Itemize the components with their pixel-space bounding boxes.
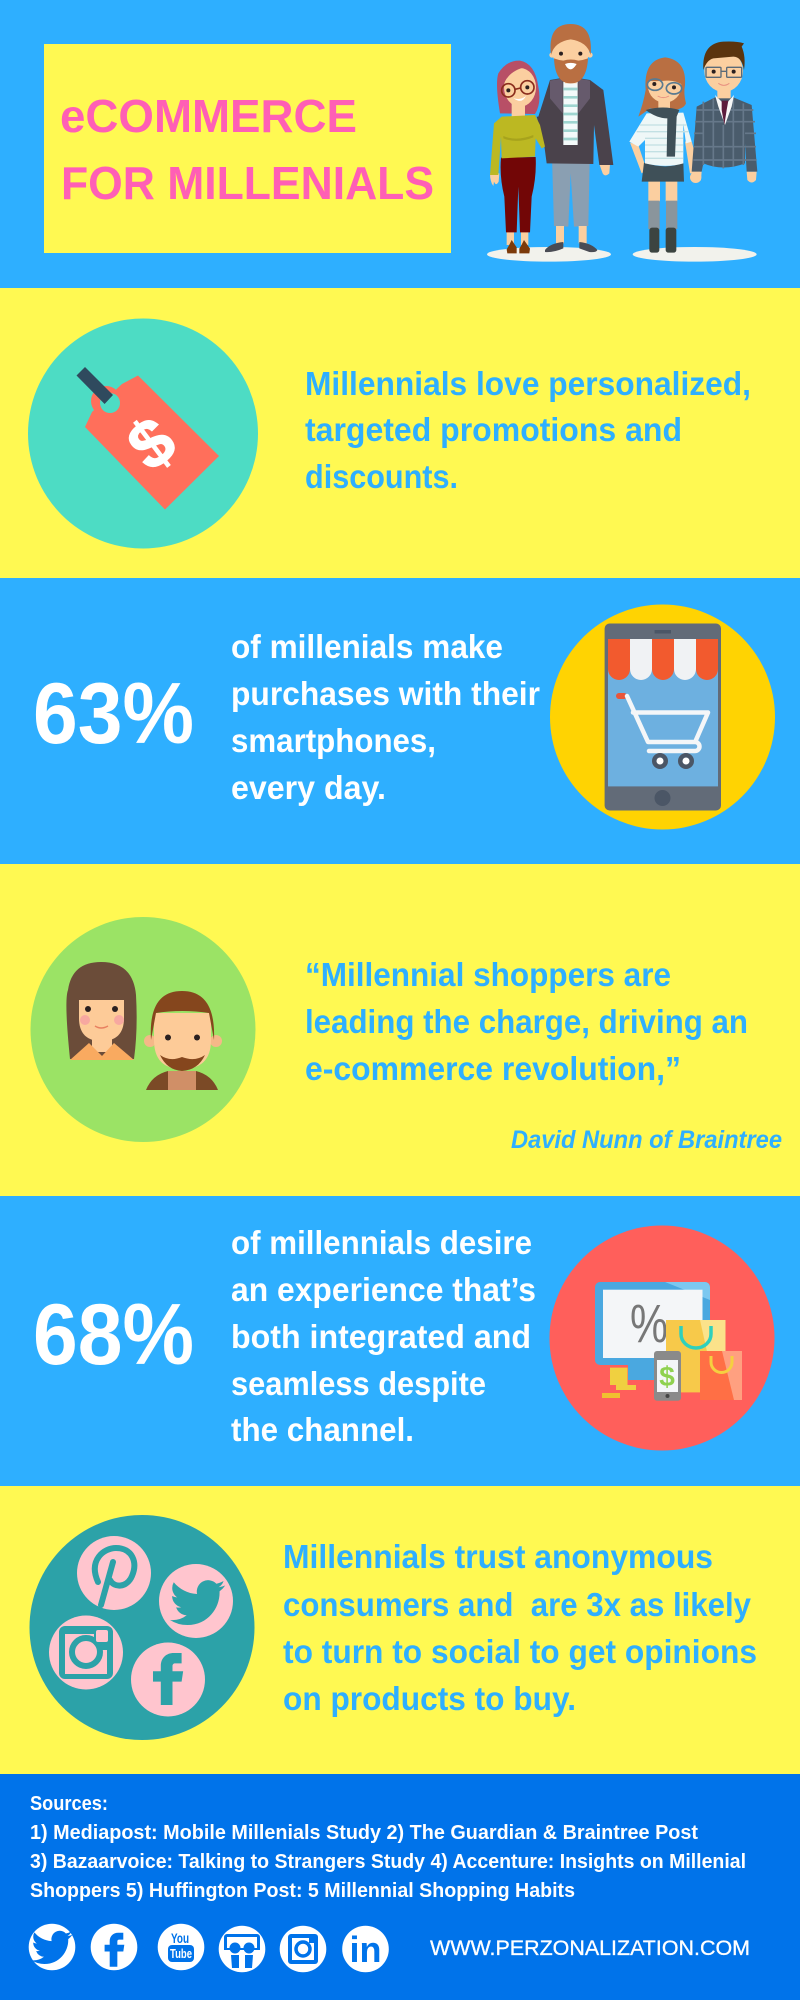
icon: youtube: Tube: [170, 1946, 192, 1961]
icon: monitor, phone and shopping bags: %: [630, 1294, 668, 1354]
text: social trust: to turn to social to get opinions: [283, 1633, 757, 1670]
text: integrated experience: both integrated and: [231, 1318, 531, 1355]
icon: pinterest: [77, 1536, 151, 1610]
icon: monitor, phone and shopping bags: $: [659, 1361, 675, 1392]
text: promotions message: [305, 365, 751, 495]
icon: price tag: [28, 318, 258, 548]
illustration: four millennials: [487, 24, 757, 262]
text: smartphone purchases: purchases with their: [231, 675, 540, 712]
text: sources: Sources:: [30, 1793, 108, 1815]
icon: slideshare: [219, 1926, 265, 1972]
text: integrated experience: the channel.: [231, 1411, 414, 1448]
panel: quote: [0, 864, 800, 1196]
text: quote: e-commerce revolution,”: [305, 1050, 681, 1087]
icon: social media cluster: [30, 1515, 254, 1740]
title box: [44, 44, 451, 253]
text: promotions message: targeted promotions and: [305, 411, 682, 448]
icon: monitor, phone and shopping bags: [550, 1226, 774, 1450]
text: social trust: on products to buy.: [283, 1680, 576, 1717]
panel: footer: [0, 1774, 800, 2000]
text: sources: Shoppers 5) Huffington Post: 5 Millennial Shopping Habits: [30, 1880, 575, 1902]
text: smartphone purchases: of millenials make: [231, 628, 503, 665]
stat: 63%: 63%: [33, 666, 194, 762]
icon: instagram: [49, 1616, 123, 1690]
icon: instagram: [280, 1926, 326, 1972]
text: quote: [305, 956, 748, 1087]
text: promotions message: Millennials love personalized,: [305, 365, 751, 402]
icon: twitter: [29, 1924, 75, 1970]
text: smartphone purchases: smartphones,: [231, 722, 436, 759]
text: smartphone purchases: every day.: [231, 769, 386, 806]
panel: 63% smartphones: [0, 578, 800, 864]
text: social trust: Millennials trust anonymous: [283, 1538, 713, 1575]
text: sources: 3) Bazaarvoice: Talking to Strangers Study 4) Accenture: Insights on Millenial: [30, 1851, 746, 1873]
text: social trust: [283, 1538, 757, 1717]
icon: youtube: You: [171, 1930, 189, 1946]
icon: couple avatars: [30, 917, 256, 1142]
text: social trust: consumers and are 3x as likely: [283, 1586, 752, 1623]
icon: linkedin: [342, 1926, 389, 1972]
text: integrated experience: seamless despite: [231, 1365, 486, 1402]
panel: social trust: [0, 1486, 800, 1774]
icon: youtube: [158, 1924, 204, 1970]
text: sources: [30, 1793, 746, 1902]
text: integrated experience: an experience that’s: [231, 1271, 536, 1308]
text: quote: leading the charge, driving an: [305, 1003, 748, 1040]
title box: FOR MILLENIALS: [61, 157, 434, 209]
title box: eCOMMERCE: [60, 90, 357, 142]
icon: phone with shopping cart: [550, 604, 775, 830]
text: website: WWW.PERZONALIZATION.COM: [430, 1937, 750, 1960]
text: sources: 1) Mediapost: Mobile Millenials Study 2) The Guardian & Braintree Post: [30, 1822, 698, 1844]
text: attribution: David Nunn of Braintree: [511, 1126, 782, 1154]
text: promotions message: discounts.: [305, 458, 458, 495]
text: integrated experience: [231, 1224, 536, 1448]
icon: linkedin: in: [350, 1929, 382, 1970]
text: integrated experience: of millennials desire: [231, 1224, 532, 1261]
stat: 68%: 68%: [33, 1287, 194, 1383]
panel: 68% experience: [0, 1196, 800, 1486]
icon: price tag: $: [114, 402, 190, 486]
panel: header: [0, 0, 800, 288]
icon: facebook: [131, 1642, 205, 1716]
icon: twitter: [159, 1564, 233, 1638]
text: quote: “Millennial shoppers are: [305, 956, 671, 993]
icon: facebook: [91, 1924, 137, 1970]
text: smartphone purchases: [231, 628, 540, 806]
panel: personalized promotions: [0, 288, 800, 578]
